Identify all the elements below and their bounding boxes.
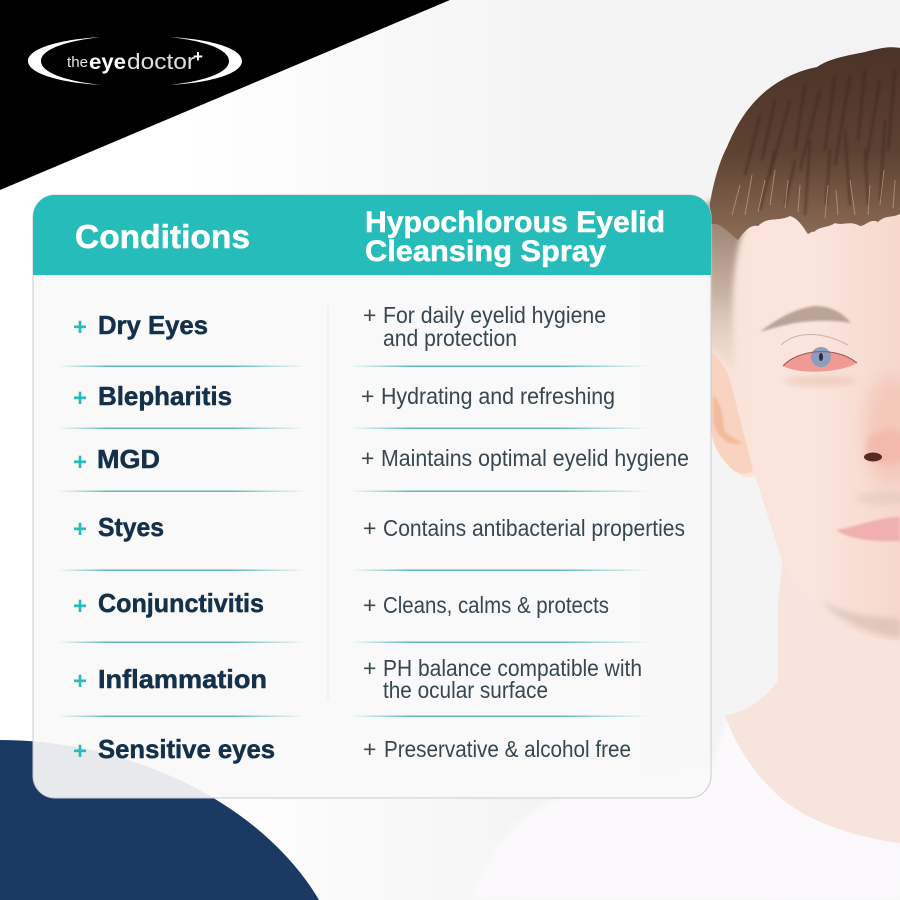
benefit: cleans: + (363, 592, 376, 618)
column divider (328, 305, 329, 700)
condition: blepharitis: Blepharitis (98, 381, 232, 411)
header band (33, 195, 711, 275)
eyebrow (760, 306, 851, 332)
lid line (783, 352, 857, 366)
condition: MGD (73, 444, 160, 476)
condition: sensitive eyes: + (73, 738, 87, 765)
benefit: antibacterial: Contains antibacterial properties (383, 515, 685, 541)
black corner triangle (0, 0, 450, 190)
hair (710, 47, 900, 240)
lips (836, 517, 900, 541)
pupil (819, 353, 823, 361)
hair highlights (732, 170, 895, 218)
benefit: daily hygiene (363, 302, 606, 351)
condition: inflammation: Inflammation (98, 664, 267, 694)
ear inner shadow (713, 395, 742, 444)
condition: MGD: + (73, 449, 87, 476)
sideburn fade (708, 200, 745, 375)
benefits list (361, 302, 689, 762)
heading: spray (365, 206, 665, 268)
heading: spray: Cleansing Spray (365, 235, 606, 268)
benefit: cleans: Cleans, calms & protects (383, 592, 609, 618)
card body (33, 195, 711, 798)
benefit: pH balance: + (363, 655, 376, 681)
benefit: daily hygiene: + (363, 302, 376, 328)
condition: inflammation: + (73, 668, 87, 695)
photo: man with red eye (470, 47, 900, 900)
condition: sensitive eyes: Sensitive eyes (98, 734, 275, 764)
neck (725, 560, 900, 843)
benefit: hydrating: + (361, 383, 374, 409)
logo wordmark: doctor (127, 49, 195, 74)
benefit: pH balance: the ocular surface (383, 677, 548, 703)
panel: comparison table (33, 195, 711, 798)
nostril (864, 452, 882, 462)
benefit: pH balance (363, 655, 642, 703)
white t-shirt (470, 716, 900, 900)
nose tip (866, 429, 900, 465)
nose flush (864, 375, 900, 485)
condition: styes: + (73, 516, 87, 543)
sclera (783, 352, 857, 372)
red eye (783, 347, 857, 387)
logo plus: + (193, 47, 203, 66)
conditions list (73, 310, 275, 765)
condition: MGD: MGD (97, 444, 160, 474)
condition: dry eyes: + (73, 314, 87, 341)
benefit: pH balance: PH balance compatible with (383, 655, 642, 681)
logo wordmark (67, 49, 195, 74)
hair dark strands (745, 70, 895, 215)
condition: blepharitis: + (73, 385, 87, 412)
heading: conditions: Conditions (75, 218, 250, 255)
moustache stubble (857, 491, 900, 505)
condition: conjunctivitis: Conjunctivitis (98, 588, 264, 618)
benefit: hydrating: Hydrating and refreshing (381, 383, 615, 409)
benefit: preservative free: + (363, 736, 376, 762)
logo: the eye doctor+ (28, 37, 242, 85)
navy quarter circle (0, 740, 319, 900)
benefit: optimal hygiene: + (361, 445, 374, 471)
benefit: antibacterial: + (363, 515, 376, 541)
condition: styes (73, 512, 164, 543)
logo wordmark: eye (89, 51, 126, 74)
condition: dry eyes: Dry Eyes (98, 310, 208, 340)
benefit: daily hygiene: For daily eyelid hygiene (383, 302, 606, 328)
eye socket crease (781, 334, 848, 345)
heading: spray: Hypochlorous Eyelid (365, 206, 665, 239)
benefit: preservative free: Preservative & alcohol free (384, 736, 631, 762)
condition: styes: Styes (98, 512, 164, 542)
condition: conjunctivitis: + (73, 593, 87, 620)
iris (811, 347, 831, 367)
logo swoosh (28, 37, 242, 85)
ear shading (711, 352, 753, 474)
logo wordmark: the (67, 54, 88, 71)
benefit: optimal hygiene: Maintains optimal eyelid hygiene (381, 445, 689, 471)
chin stubble (820, 600, 900, 638)
under-eye shadow (784, 375, 856, 387)
benefit: daily hygiene: and protection (383, 325, 517, 351)
face and ear silhouette (711, 205, 900, 640)
